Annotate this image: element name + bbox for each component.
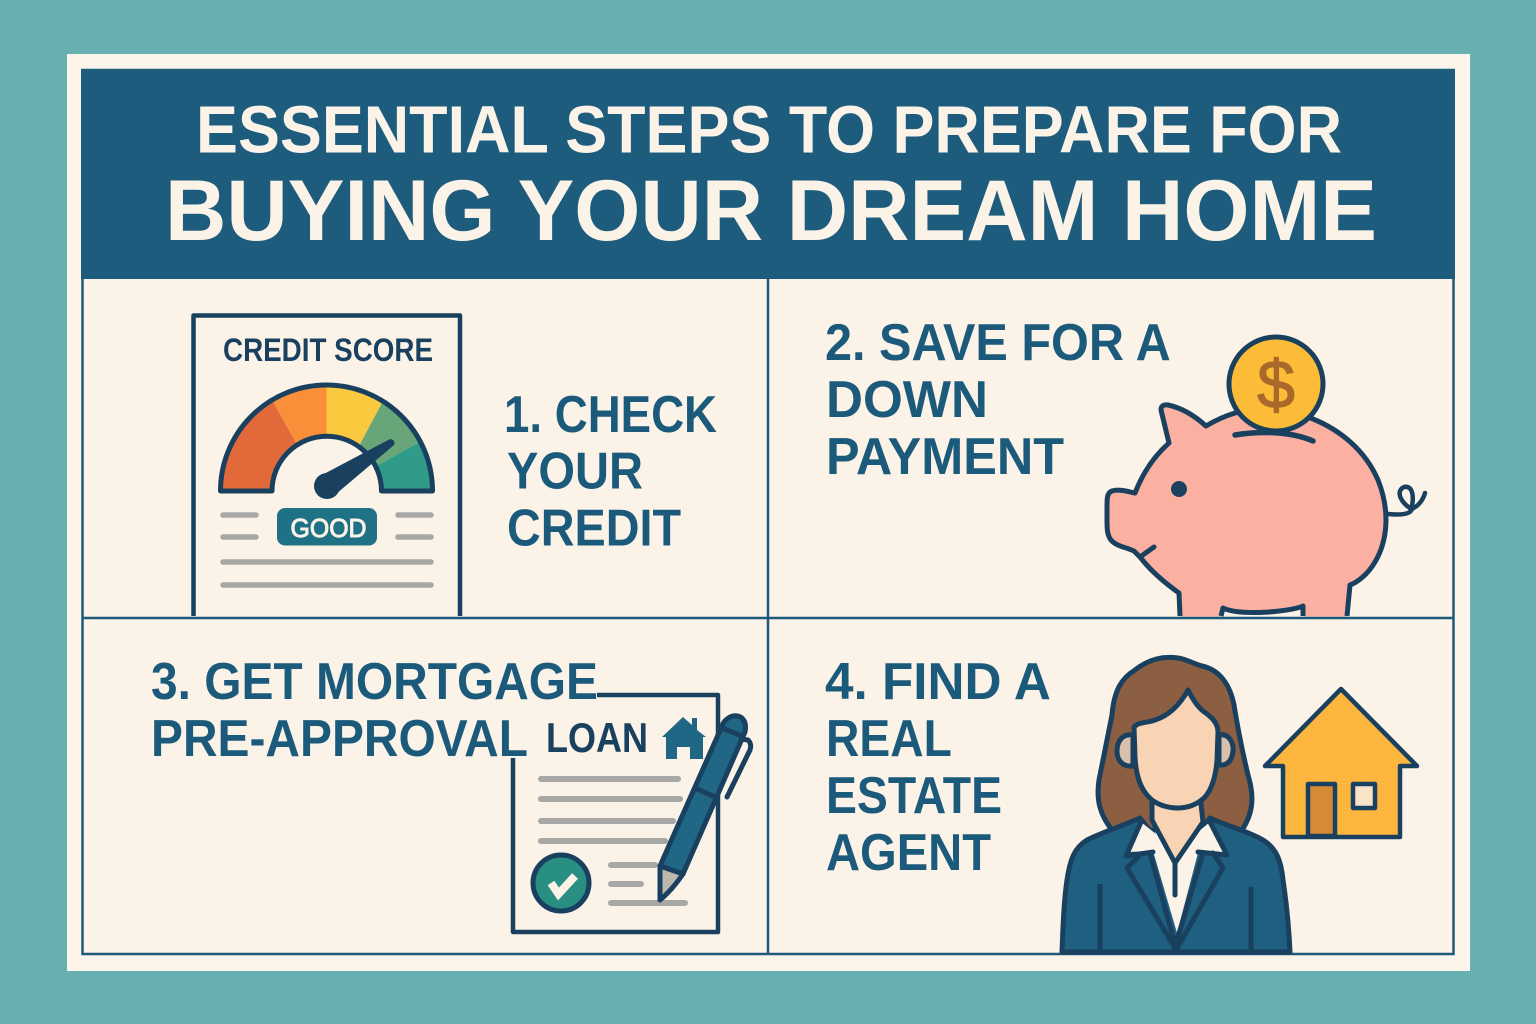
step 4 text: REAL <box>826 710 951 768</box>
needle <box>322 439 394 494</box>
icon: pen <box>660 716 751 900</box>
step 2 text: DOWN <box>826 371 988 429</box>
credit score label: CREDIT SCORE <box>223 332 433 368</box>
step 1 text: YOUR <box>507 442 643 500</box>
step 2 text: PAYMENT <box>826 428 1064 486</box>
pig body <box>1107 405 1386 616</box>
good badge: GOOD <box>290 513 366 543</box>
neck <box>1152 795 1203 863</box>
icon: agent <box>1062 657 1290 952</box>
panel grid <box>82 70 1454 954</box>
panel 2: save for a down payment <box>825 314 1425 616</box>
shirt and collar <box>1127 822 1225 933</box>
step 1 text: CREDIT <box>507 500 681 558</box>
step 2 text: 2. SAVE FOR A <box>825 314 1170 372</box>
title line 1: ESSENTIAL STEPS TO PREPARE FOR <box>196 92 1342 168</box>
ears <box>1117 735 1133 766</box>
face <box>1134 690 1218 808</box>
step 4 text: ESTATE <box>826 767 1002 825</box>
icon: coin: $ <box>1257 347 1295 423</box>
icon: piggy bank <box>1107 337 1425 616</box>
pig tail <box>1388 487 1425 514</box>
step 1 text: 1. CHECK <box>504 386 717 444</box>
lapels <box>1127 853 1223 943</box>
gauge <box>220 385 433 499</box>
jacket <box>1062 818 1290 952</box>
loan label: LOAN <box>546 714 648 761</box>
title line 2: BUYING YOUR DREAM HOME <box>165 163 1377 259</box>
step 4 text: AGENT <box>826 824 991 882</box>
icon: credit score document <box>194 316 460 616</box>
step 3 text: 3. GET MORTGAGE <box>151 653 598 711</box>
step 3 text: PRE-APPROVAL <box>151 710 528 768</box>
panel 3: mortgage pre-approval <box>151 653 751 932</box>
icon: house <box>1265 689 1417 837</box>
title banner <box>81 69 1455 279</box>
icon: check badge <box>533 855 589 911</box>
icon: coin <box>1229 337 1323 431</box>
hair <box>1098 657 1252 830</box>
icon: small house <box>662 717 706 759</box>
panel 4: real estate agent <box>825 653 1417 952</box>
panel 1: check your credit <box>194 316 731 616</box>
good badge <box>277 508 377 546</box>
icon: loan document <box>513 695 751 932</box>
step 4 text: 4. FIND A <box>825 653 1050 711</box>
